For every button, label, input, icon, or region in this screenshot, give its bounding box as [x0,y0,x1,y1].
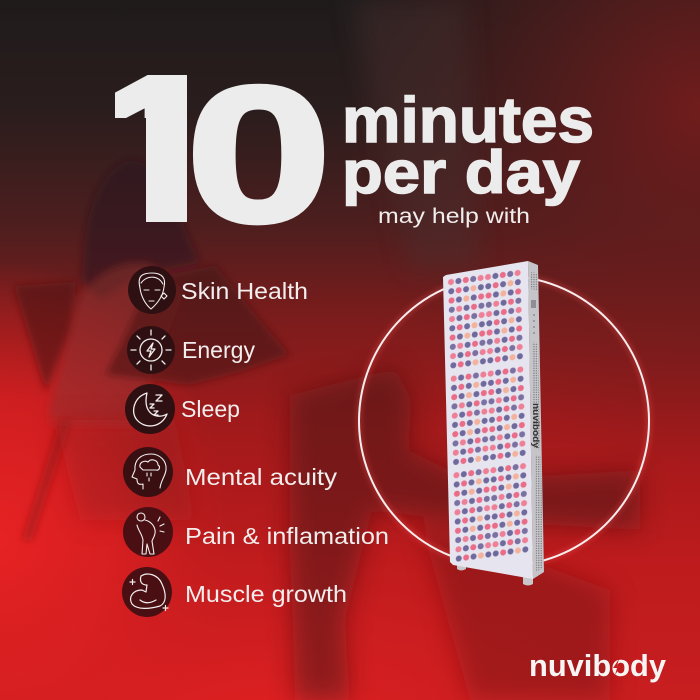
item: pain and inflammation [123,507,389,557]
LED rows [447,268,529,564]
item: sleep [125,384,240,434]
icon: flexed arm [122,567,172,617]
item: muscle growth [122,567,347,617]
item: mental acuity [123,447,338,497]
panel controls [531,300,536,334]
label: muscle growth: Muscle growth [185,581,347,607]
list: benefits [122,266,389,617]
title: 10 [90,33,331,267]
label: sleep: Sleep [181,396,240,422]
heading: minutes: minutes [342,84,594,156]
icon: bolt in logo [613,659,621,675]
icon: sun with bolt [127,326,175,374]
icon: body with back pain [123,507,173,557]
label: pain and inflamation: Pain & inflamation [185,523,389,549]
title: 10: 1 [90,33,230,267]
logo: nuvibody: nuvibody [529,648,667,683]
icon: moon with z [125,384,175,434]
icon: head with cloud [123,447,173,497]
circle ring behind the panel [359,276,649,566]
item: energy [127,326,256,374]
panel feet [457,562,533,586]
product: LED light panel [443,261,544,586]
label: skin health: Skin Health [181,278,308,304]
icon: face [128,266,176,314]
item: skin health [128,266,308,314]
label: mental acuity: Mental acuity [185,464,338,490]
title: 10: 0 [186,46,331,262]
panel side logo: nuvibody [531,403,541,448]
panel side [528,261,544,579]
panel face [443,261,533,579]
heading: per day: per day [342,139,581,206]
subheading: may help with: may help with [378,205,530,228]
label: energy: Energy [182,337,256,363]
mesh vents [530,272,543,572]
